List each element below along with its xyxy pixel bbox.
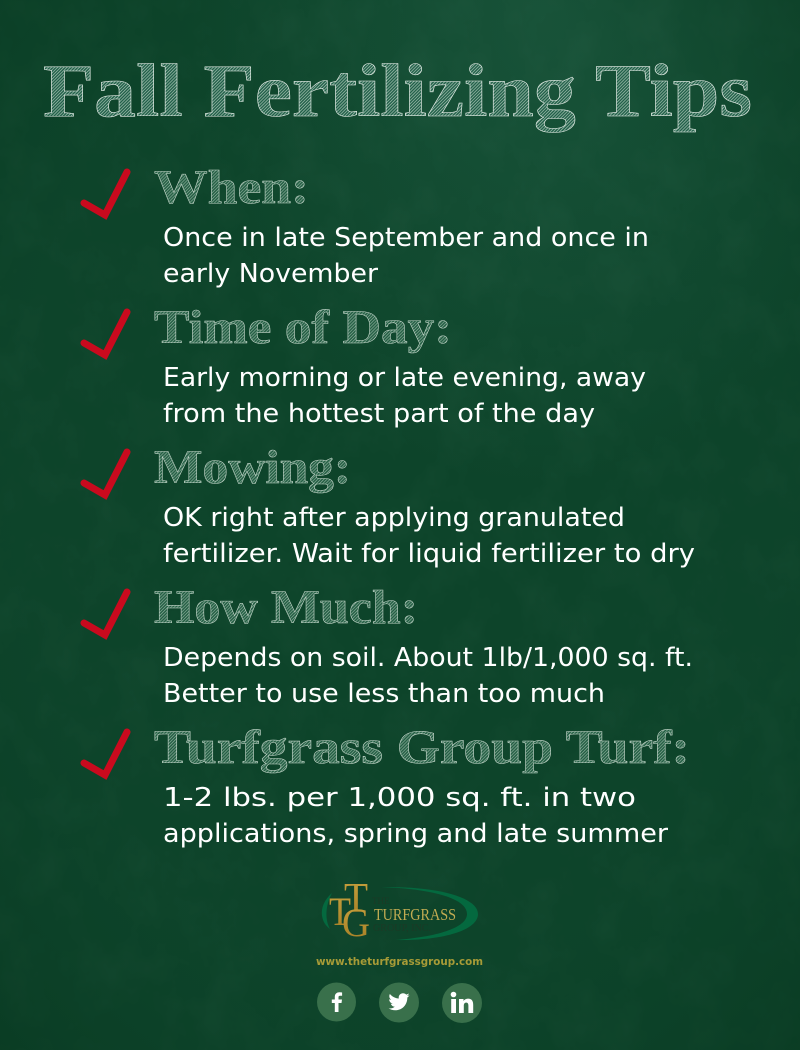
heading: how much: How Much: xyxy=(154,581,418,634)
logo: the turfgrass group: G xyxy=(342,900,370,945)
icon: check mark xyxy=(84,592,127,635)
heading: turfgrass group turf: Turfgrass Group Turf: xyxy=(154,721,690,774)
icon: check mark xyxy=(84,452,127,495)
text: when: early November xyxy=(163,259,379,289)
heading: time of day: Time of Day: xyxy=(154,301,452,354)
text: time of day: from the hottest part of the day xyxy=(163,399,595,429)
icon: twitter xyxy=(379,982,419,1022)
icon: check mark xyxy=(84,312,127,355)
website url: www.theturfgrassgroup.com xyxy=(316,955,483,968)
text: when: Once in late September and once in xyxy=(163,223,649,253)
text: turfgrass group turf xyxy=(163,783,669,849)
text: turfgrass group turf: 1-2 lbs. per 1,000 sq. ft. in two xyxy=(163,783,636,813)
tip: turfgrass group turf xyxy=(84,721,690,849)
text: turfgrass group turf: applications, spring and late summer xyxy=(163,819,669,849)
heading: when: When: xyxy=(154,161,309,214)
tip: mowing xyxy=(84,441,695,569)
heading: mowing: Mowing: xyxy=(154,441,351,494)
logo: the turfgrass group: T xyxy=(344,876,368,922)
text: how much xyxy=(163,643,693,709)
icon: linkedin xyxy=(442,983,482,1023)
text: time of day xyxy=(163,363,646,429)
logo: the turfgrass group xyxy=(322,876,478,945)
logo: the turfgrass group: T xyxy=(329,889,351,934)
text: mowing: OK right after applying granulated xyxy=(163,503,625,533)
tip: when xyxy=(84,161,649,289)
logo: the turfgrass group: THE xyxy=(372,896,390,906)
icon: facebook xyxy=(317,982,356,1022)
text: how much: Depends on soil. About 1lb/1,000 sq. ft. xyxy=(163,643,693,673)
tip: how much xyxy=(84,581,693,709)
text: how much: Better to use less than too much xyxy=(163,679,605,709)
title: Fall Fertilizing Tips xyxy=(43,50,752,133)
icon: check mark xyxy=(84,732,127,775)
social icons xyxy=(317,982,482,1023)
text: time of day: Early morning or late evening, away xyxy=(163,363,646,393)
logo: the turfgrass group: TURFGRASS xyxy=(374,905,456,924)
tip: time of day xyxy=(84,301,646,429)
icon: check mark xyxy=(84,172,127,215)
text: mowing: fertilizer. Wait for liquid fertilizer to dry xyxy=(163,539,695,569)
text: when xyxy=(163,223,649,289)
text: mowing xyxy=(163,503,695,569)
logo: the turfgrass group: GROUP, INC. xyxy=(373,923,431,934)
